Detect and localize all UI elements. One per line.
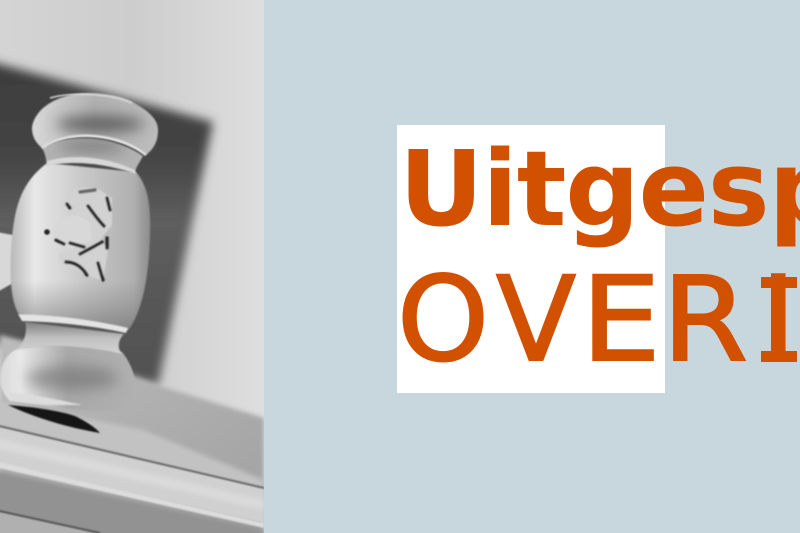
coat of arms emblem xyxy=(44,188,112,281)
title: regular line: V xyxy=(496,251,576,388)
title: regular line: O xyxy=(397,251,489,388)
gavel foot xyxy=(0,346,135,411)
gavel barrel xyxy=(10,163,150,330)
title: regular line xyxy=(397,251,797,388)
gavel upper neck xyxy=(42,138,143,172)
title: regular line: E xyxy=(581,251,661,388)
gavel xyxy=(0,93,158,411)
table top xyxy=(0,335,264,533)
background wall xyxy=(0,0,264,533)
dark chair back xyxy=(0,56,213,385)
wooden sounding block xyxy=(0,400,264,533)
gavel top cap xyxy=(32,93,158,155)
gavel ring xyxy=(18,314,128,333)
gavel lower neck xyxy=(16,322,124,354)
gavel bottom plate xyxy=(8,392,82,405)
title: regular line: I xyxy=(761,251,796,388)
title: regular line: R xyxy=(662,251,748,388)
gavel handle xyxy=(0,232,18,292)
photo: judge's gavel xyxy=(0,0,264,533)
white title box xyxy=(397,125,665,393)
gavel shadow xyxy=(8,405,100,433)
